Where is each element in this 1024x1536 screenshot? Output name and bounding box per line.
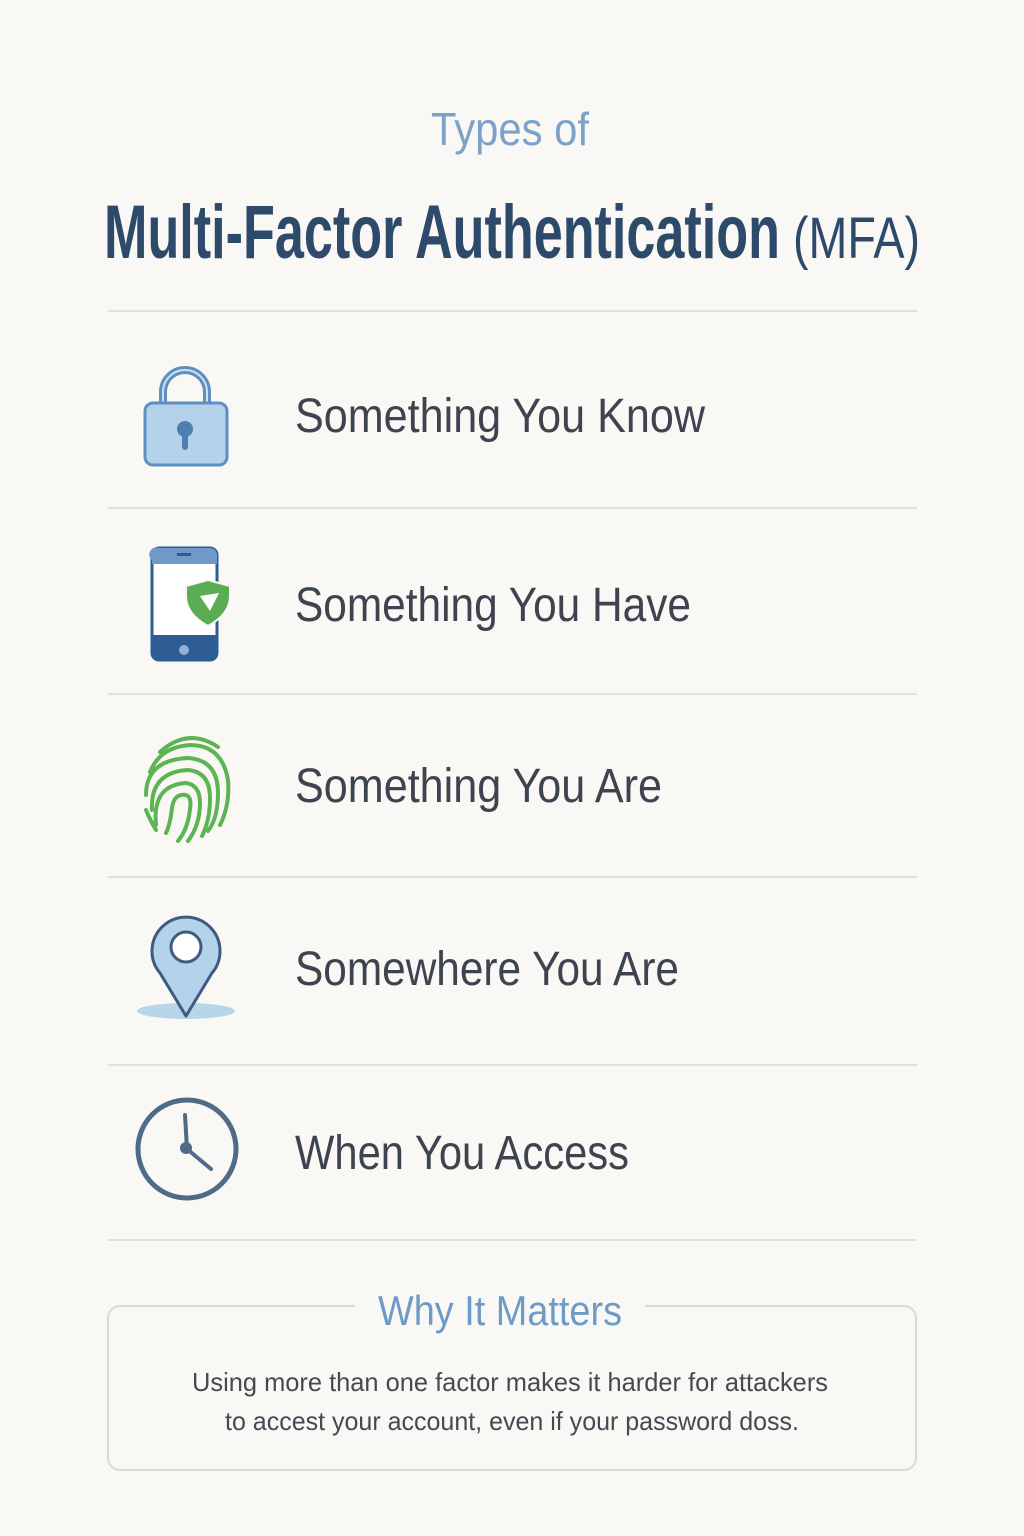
row text: are: Something You Are xyxy=(295,760,662,813)
body text: to accest your account, even if your password doss. xyxy=(225,1406,799,1436)
icon: phone with shield xyxy=(149,547,230,660)
icon: clock xyxy=(138,1100,236,1198)
icon: fingerprint xyxy=(146,738,228,841)
icon: location pin xyxy=(137,917,235,1019)
icon: padlock xyxy=(145,370,227,465)
body text: Using more than one factor makes it harder for attackers xyxy=(192,1367,828,1397)
body text xyxy=(192,1367,828,1436)
heading: why it matters: Why It Matters xyxy=(378,1287,622,1334)
row text: know: Something You Know xyxy=(295,390,705,443)
panel: why it matters xyxy=(108,1287,916,1470)
row text: when: When You Access xyxy=(295,1127,629,1180)
row text: have: Something You Have xyxy=(295,579,691,632)
row text: somewhere: Somewhere You Are xyxy=(295,943,679,996)
subtitle: Types of xyxy=(431,103,589,155)
title: (MFA) xyxy=(793,206,920,271)
